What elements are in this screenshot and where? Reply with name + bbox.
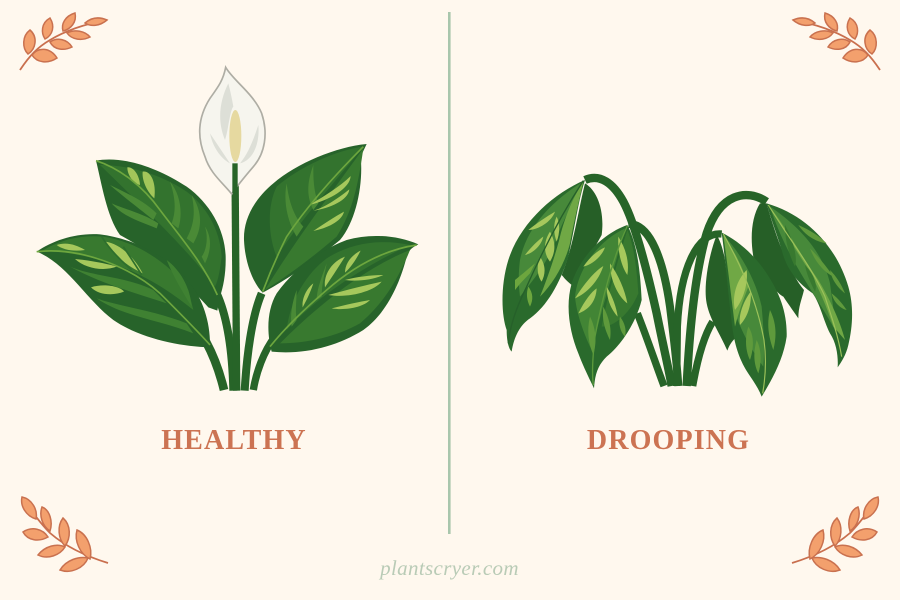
leaf: outer right xyxy=(767,203,852,367)
sprig: bottom left xyxy=(22,497,108,571)
center stem xyxy=(235,163,237,391)
footer website: plantscryer.com xyxy=(378,556,519,580)
flower: white spathe xyxy=(200,67,265,194)
leaf: back left, dark xyxy=(562,183,602,286)
leaf: lower left xyxy=(37,234,210,347)
stems xyxy=(206,293,275,391)
leaf: inner right xyxy=(722,233,787,397)
sprig: top left xyxy=(20,13,107,70)
leaf: back right, inner dark xyxy=(706,235,737,351)
leaf: inner left xyxy=(569,225,642,388)
leaf: upper right xyxy=(244,144,367,293)
heading: HEALTHY: HEALTHY xyxy=(161,425,307,456)
leaf: lower right xyxy=(268,236,418,352)
sprig: bottom right xyxy=(792,497,878,571)
heading: DROOPING: DROOPING xyxy=(587,425,750,456)
stems xyxy=(585,178,767,386)
center divider xyxy=(448,12,451,534)
leaf: front left xyxy=(502,180,585,352)
illustration: healthy plant xyxy=(37,67,418,391)
leaf: upper left xyxy=(96,159,226,311)
illustration: drooping plant xyxy=(502,178,852,397)
sprig: top right xyxy=(793,13,880,70)
leaf: back right, outer dark xyxy=(752,203,804,318)
